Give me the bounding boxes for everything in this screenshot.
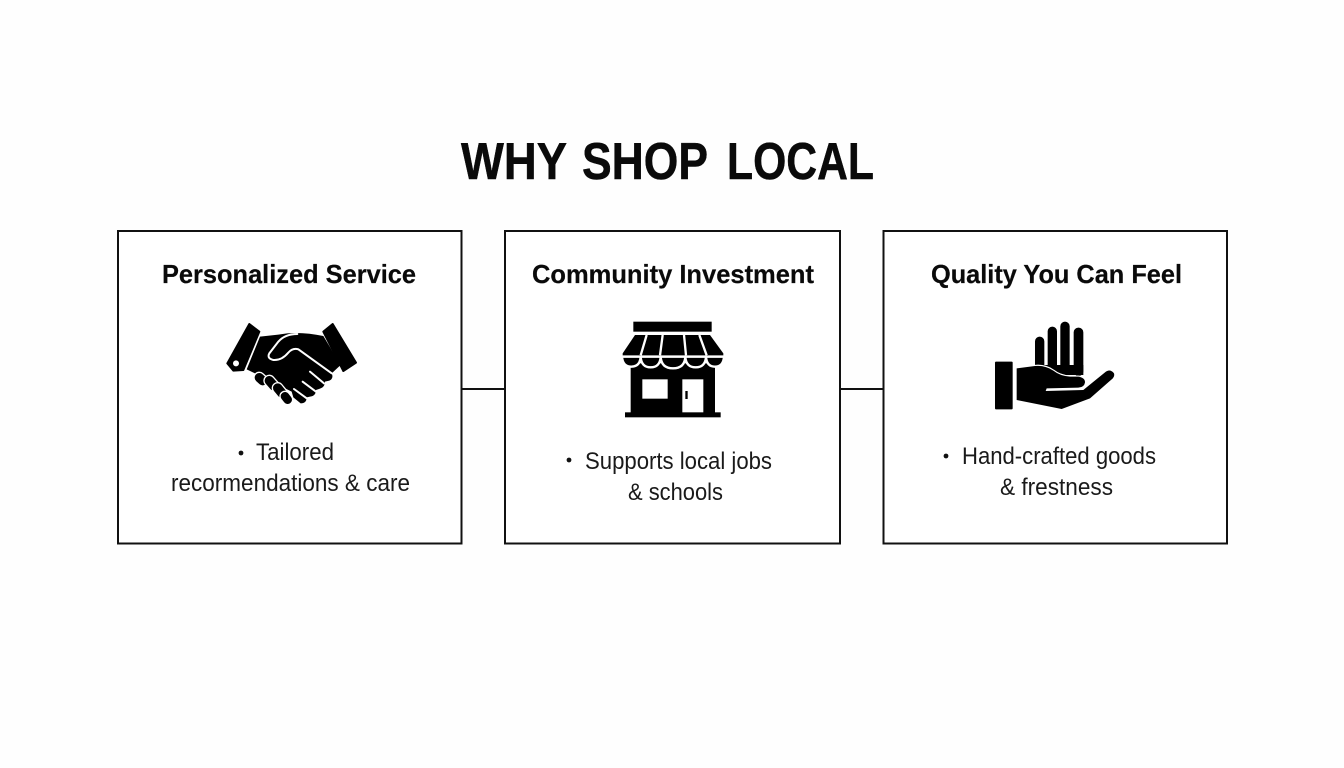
bullet text: Supports local jobs [585, 448, 772, 475]
heading: personalized service: Personalized Service [162, 259, 416, 289]
bullet text [567, 448, 772, 506]
icon: handshake [227, 324, 356, 403]
panel: quality you can feel [884, 231, 1227, 544]
connector: first to second panel [462, 388, 504, 390]
panel: personalized service [118, 231, 462, 544]
connector: second to third panel [840, 388, 883, 390]
bullet text: & frestness [1000, 474, 1113, 501]
bullet text: Hand-crafted goods [962, 443, 1156, 470]
title [461, 133, 874, 191]
heading: community investment: Community Investment [532, 259, 814, 289]
bullet text [171, 439, 410, 497]
title: SHOP [582, 133, 708, 191]
heading: quality you can feel: Quality You Can Feel [931, 259, 1182, 289]
bullet text [944, 443, 1156, 501]
panel: community investment [505, 231, 840, 544]
bullet text: & schools [628, 479, 723, 506]
title: LOCAL [727, 133, 874, 191]
bullet text: recormendations & care [171, 470, 410, 497]
icon: storefront [622, 322, 724, 417]
title: WHY [461, 133, 567, 191]
bullet text: Tailored [256, 439, 334, 466]
icon: open hand [995, 322, 1114, 409]
